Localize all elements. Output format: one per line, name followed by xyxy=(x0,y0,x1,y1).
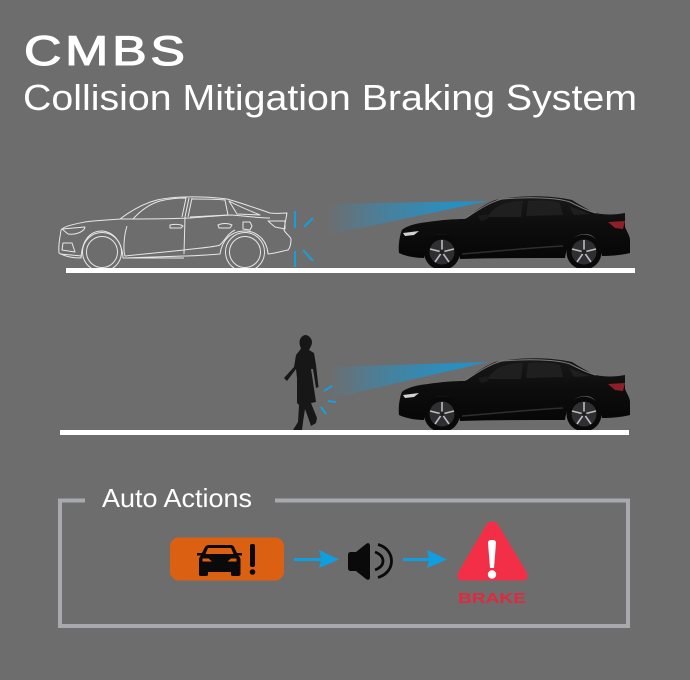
sensor ticks xyxy=(321,386,336,414)
radar beam xyxy=(327,201,488,235)
pedestrian silhouette xyxy=(284,335,318,430)
panel frame xyxy=(60,500,628,626)
scene: car ahead xyxy=(59,196,635,273)
brake label: BRAKE xyxy=(458,591,526,607)
icon: forward collision warning xyxy=(170,538,284,580)
black car xyxy=(399,358,630,432)
scene: pedestrian xyxy=(60,335,630,435)
road line xyxy=(60,430,629,435)
road line xyxy=(66,268,635,273)
arrow xyxy=(294,550,339,568)
sensor ticks xyxy=(295,211,313,267)
outlined target car xyxy=(59,197,291,272)
subtitle: Collision Mitigation Braking System xyxy=(23,77,637,118)
panel heading: Auto Actions xyxy=(102,483,252,513)
radar beam xyxy=(332,362,488,398)
icon: speaker xyxy=(348,543,392,580)
panel: auto actions xyxy=(60,483,628,626)
title: CMBS xyxy=(24,28,189,75)
arrow xyxy=(403,550,447,568)
icon: brake warning xyxy=(457,522,528,607)
black car xyxy=(399,196,630,270)
